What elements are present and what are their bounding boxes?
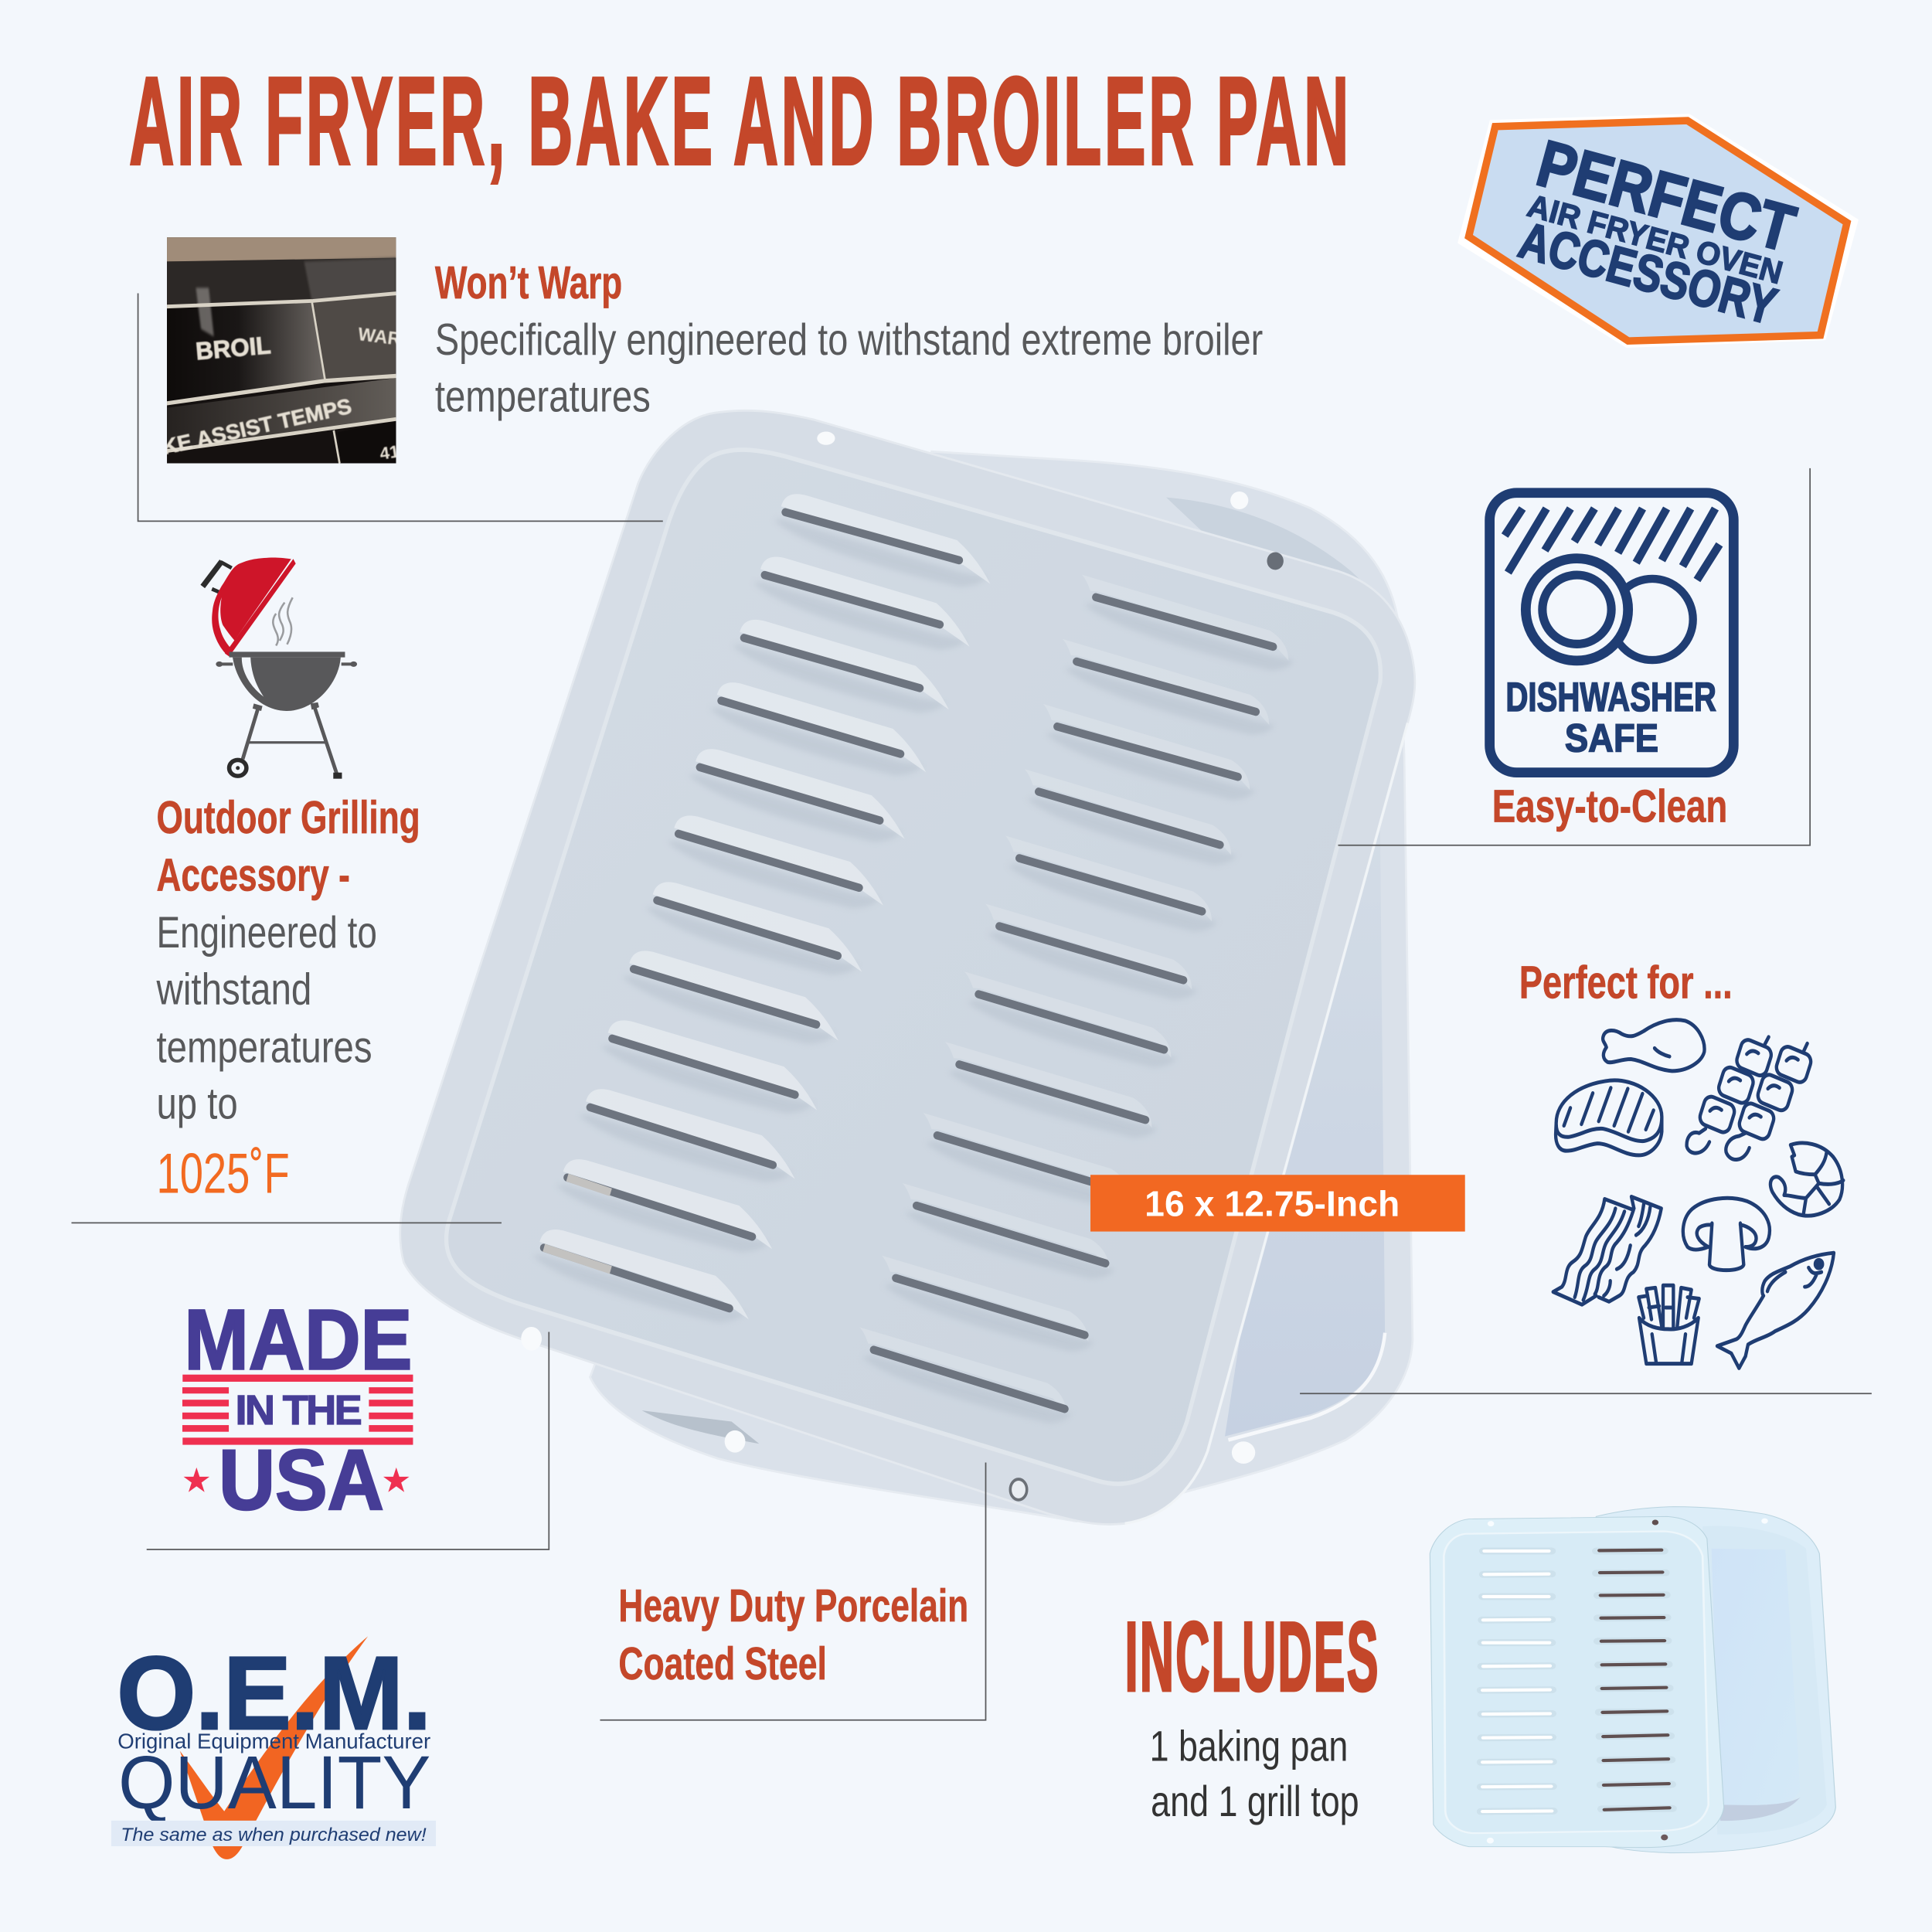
icon: drumstick <box>1603 1020 1705 1071</box>
leader line: perfect for <box>1300 1393 1872 1394</box>
logo: oem quality: QUALITY <box>118 1740 430 1825</box>
size tag: 16 x 12.75-inch: 16 x 12.75-Inch <box>1145 1184 1400 1224</box>
photo: oven broil panel <box>160 237 402 464</box>
icon: dishwasher safe: DISHWASHER <box>1505 675 1716 720</box>
text: grilling description: withstand <box>156 964 311 1014</box>
icon: dishwasher safe <box>1490 493 1733 773</box>
photo: oven broil panel: WAR <box>357 324 402 350</box>
leader line: porcelain coated steel <box>600 1463 986 1720</box>
text: won't warp description: temperatures <box>435 372 651 422</box>
badge: perfect air fryer oven accessory: AIR FRYER OVEN <box>1524 187 1787 291</box>
heading: perfect for: Perfect for ... <box>1519 957 1733 1008</box>
text: won't warp description <box>435 315 1263 422</box>
grill top <box>400 410 1415 1525</box>
leader line: made in the usa <box>147 1332 549 1549</box>
leader line: won't warp <box>138 293 663 521</box>
heading: heavy duty porcelain coated steel <box>618 1580 968 1689</box>
heading: heavy duty porcelain coated steel: Heavy Duty Porcelain <box>618 1580 968 1631</box>
product photo: broiler pan and grill top <box>400 410 1415 1525</box>
logo: made in the usa: USA <box>219 1433 384 1528</box>
slots: right column <box>849 575 1300 1431</box>
infographic page: INCLUDES <box>1125 1603 1380 1713</box>
icons: foods <box>1553 1020 1843 1368</box>
stat: 1025 degrees F: 1025˚F <box>156 1141 290 1205</box>
logo: made in the usa: MADE <box>184 1292 412 1387</box>
logo: made in the usa <box>182 1292 413 1528</box>
text: grilling description: temperatures <box>156 1022 372 1072</box>
icon: fish <box>1717 1253 1834 1368</box>
text: won't warp description: Specifically engineered to withstand extreme broiler <box>435 315 1263 365</box>
icon: fries <box>1638 1285 1699 1364</box>
text: grilling description <box>156 908 377 1129</box>
logo: made in the usa: IN THE <box>236 1387 362 1434</box>
icon: kettle grill <box>202 557 357 779</box>
slots: left column <box>529 488 998 1333</box>
grill top <box>1430 1516 1724 1848</box>
text: grilling description: Engineered to <box>156 908 377 957</box>
slots: right column <box>1596 1550 1672 1810</box>
icon: shrimp <box>1770 1143 1843 1216</box>
icon: dishwasher safe: SAFE <box>1565 716 1658 760</box>
heading: outdoor grilling accessory: Outdoor Grilling <box>156 792 420 843</box>
baking pan <box>1596 1507 1835 1853</box>
heading: outdoor grilling accessory: Accessory - <box>156 850 350 901</box>
size tag: 16 x 12.75-inch <box>1090 1175 1465 1232</box>
badge: perfect air fryer oven accessory <box>1465 121 1851 341</box>
heading: heavy duty porcelain coated steel: Coated Steel <box>618 1638 827 1689</box>
logo: oem quality: O.E.M. <box>117 1636 431 1751</box>
caption: easy-to-clean: Easy-to-Clean <box>1492 781 1727 832</box>
slots: left column <box>1481 1551 1553 1811</box>
logo: oem quality: Original Equipment Manufacturer <box>117 1729 430 1753</box>
icon: bacon <box>1553 1196 1662 1304</box>
text: grilling description: up to <box>156 1080 238 1129</box>
product photo: included pan and grill top <box>1430 1507 1835 1853</box>
text: includes description: and 1 grill top <box>1151 1777 1359 1825</box>
icon: skewers <box>1687 1037 1813 1159</box>
badge: perfect air fryer oven accessory: ACCESSORY <box>1513 211 1783 336</box>
text: includes description: 1 baking pan <box>1150 1721 1348 1770</box>
logo: oem quality: The same as when purchased new! <box>121 1825 427 1845</box>
baking pan behind <box>590 451 1413 1522</box>
photo: oven broil panel: 41 <box>379 441 400 464</box>
heading: won't warp: Won’t Warp <box>435 257 622 308</box>
heading: outdoor grilling accessory <box>156 792 420 901</box>
photo: oven broil panel: KE ASSIST TEMPS <box>160 394 354 459</box>
icon: steak <box>1556 1080 1662 1155</box>
leader line: grilling <box>71 1222 502 1223</box>
leader line: easy to clean <box>1338 468 1810 845</box>
badge: perfect air fryer oven accessory: PERFECT <box>1530 127 1802 265</box>
photo: oven broil panel: BROIL <box>195 331 272 366</box>
text: includes description <box>1150 1721 1359 1825</box>
logo: oem quality <box>111 1636 436 1859</box>
icon: mushroom <box>1683 1198 1770 1270</box>
